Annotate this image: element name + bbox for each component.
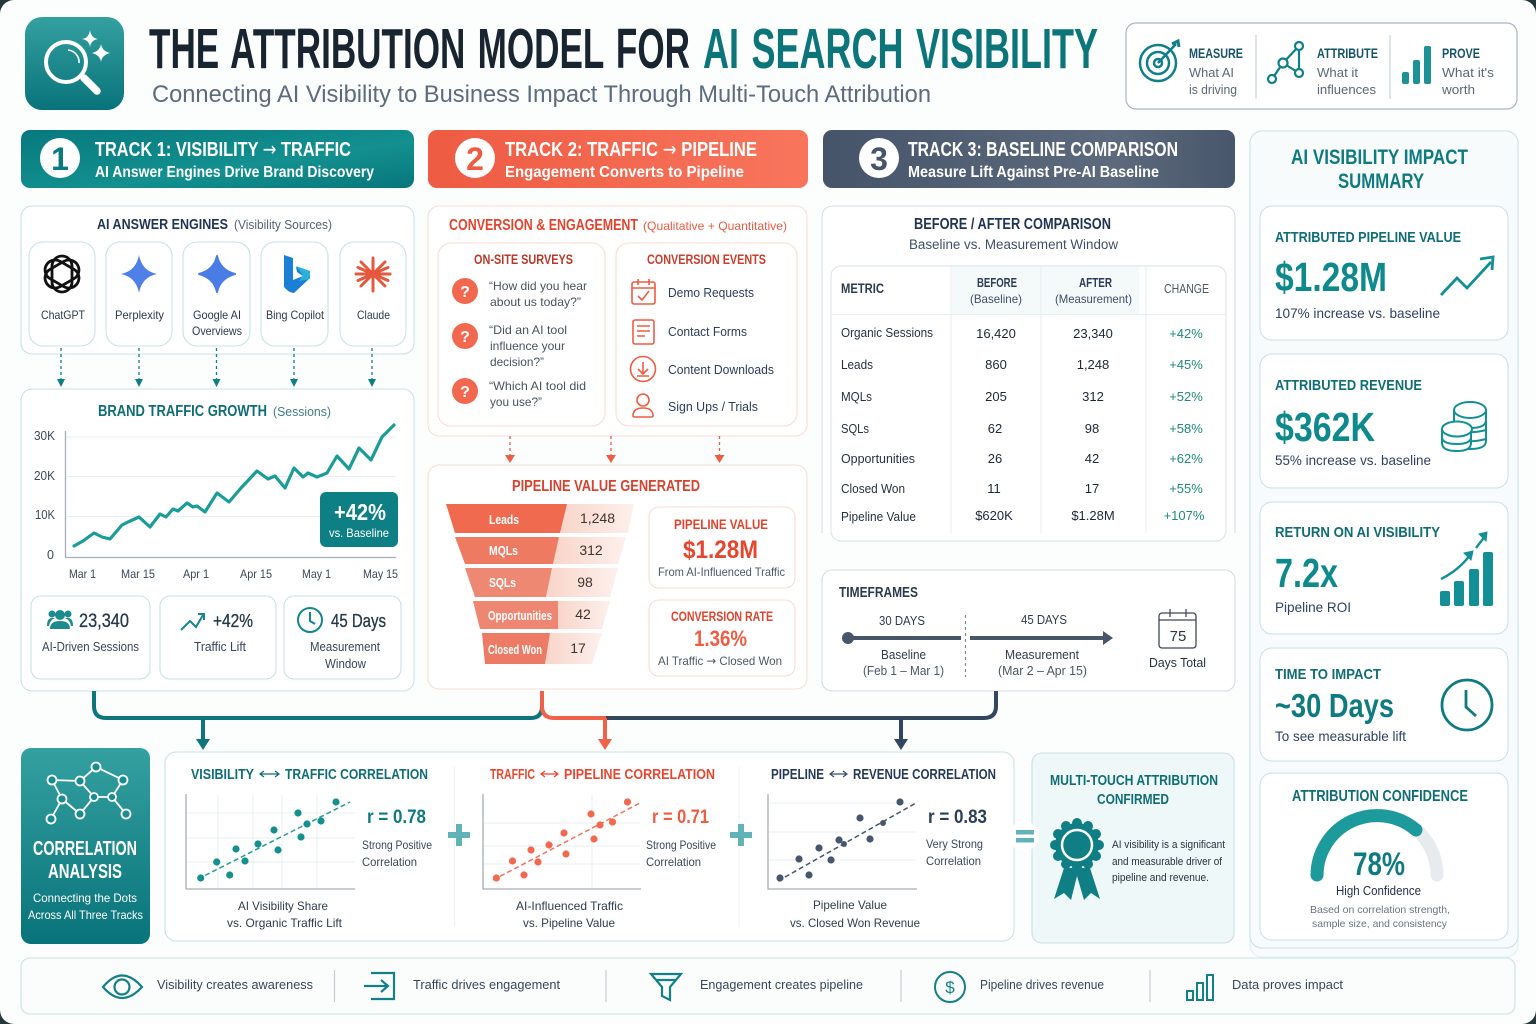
panel: measure attribute prove [1126, 23, 1517, 109]
icon: plus two [730, 824, 752, 846]
subtitle: Connecting AI Visibility to Business Impact Through Multi-Touch Attribution [152, 81, 931, 108]
chart: visibility traffic correlation: Correlation [362, 855, 417, 869]
icon: 75 days calendar: Days Total [1149, 656, 1206, 670]
panel: brand traffic growth [21, 389, 414, 691]
card: attribution confidence: sample size, and consistency [1312, 918, 1448, 930]
table: metrics: 23,340 [1073, 326, 1113, 341]
text: prove [1441, 45, 1494, 97]
funnel chart: SQLs [489, 575, 516, 590]
table: metrics: AFTER [1079, 275, 1112, 290]
timeline: (Mar 2 – Apr 15) [998, 664, 1087, 678]
engine: Perplexity [106, 242, 172, 346]
survey question 3 [452, 378, 586, 409]
heading: conversion and engagement: CONVERSION & ENGAGEMENT [449, 217, 638, 234]
table: metrics: +58% [1169, 421, 1203, 436]
funnel chart: Opportunities [488, 608, 552, 623]
text: prove: PROVE [1442, 45, 1480, 61]
heading: multi-touch attribution: CONFIRMED [1097, 792, 1169, 808]
survey question 1: about us today?” [490, 295, 581, 309]
card: return on AI visibility [1260, 502, 1508, 634]
timeline: 45 DAYS [1021, 613, 1067, 627]
engine: Perplexity: Perplexity [115, 308, 164, 322]
timeline: 30 DAYS [879, 614, 925, 628]
text: attribute: influences [1317, 83, 1376, 97]
survey question 3: you use?” [490, 395, 542, 409]
chart: pipeline revenue correlation: PIPELINE [771, 767, 824, 783]
line chart: sessions: Apr 15 [240, 567, 272, 581]
card: attributed revenue [1260, 354, 1508, 488]
track 1 header: 1 [51, 141, 69, 177]
chart: visibility traffic correlation: r = 0.78 [367, 807, 426, 828]
chart: pipeline revenue correlation: Very Strong [926, 837, 983, 851]
survey question 2: “Did an AI tool [489, 323, 567, 337]
connector: navy [605, 691, 996, 750]
text: correlation analysis: CORRELATION [33, 838, 137, 860]
table: metrics: 26 [988, 451, 1002, 466]
stat: measurement window: Window [325, 657, 367, 671]
line chart: sessions: Mar 15 [121, 567, 155, 581]
heading: pipeline value generated: PIPELINE VALUE GENERATED [512, 478, 700, 495]
heading: timeframes: TIMEFRAMES [839, 585, 918, 601]
card: attributed pipeline value: ATTRIBUTED PIPELINE VALUE [1275, 229, 1461, 246]
heading: AI answer engines [97, 216, 332, 233]
line chart: sessions: May 15 [363, 567, 398, 581]
chart: visibility traffic correlation: VISIBILITY [191, 767, 254, 783]
chart: visibility traffic correlation: vs. Organic Traffic Lift [227, 916, 343, 930]
line chart: sessions: 0 [47, 548, 54, 562]
text: measure: What AI [1189, 66, 1234, 80]
panel: correlation charts [165, 752, 1014, 941]
text: attribute: What it [1317, 66, 1359, 80]
table: metrics: 16,420 [976, 326, 1016, 341]
gauge: 78 percent [1317, 815, 1437, 882]
card: on-site surveys [438, 243, 605, 426]
card: attributed pipeline value: 107% increase vs. baseline [1275, 305, 1440, 321]
table: metrics: +55% [1169, 481, 1203, 496]
table: metrics: Closed Won [841, 482, 905, 496]
timeline: Measurement [1005, 648, 1079, 662]
footer strip [21, 958, 1515, 1014]
card: time to impact: To see measurable lift [1275, 728, 1406, 744]
panel: AI visibility impact summary [1250, 131, 1518, 957]
engine: Google AI Overviews [183, 242, 250, 346]
card: time to impact: ~30 Days [1275, 687, 1394, 724]
line chart: sessions: Apr 1 [183, 567, 209, 581]
chart: pipeline revenue correlation: Correlation [926, 854, 981, 868]
event: content downloads: Content Downloads [668, 363, 774, 377]
icon: target [1140, 41, 1179, 81]
icon: network nodes [1268, 42, 1303, 83]
card: return on AI visibility: RETURN ON AI VISIBILITY [1275, 524, 1440, 541]
survey question 1 [452, 278, 587, 309]
survey question 2: ? [460, 329, 470, 346]
card: conversion events: CONVERSION EVENTS [647, 252, 766, 267]
survey question 2 [452, 323, 567, 369]
stat: traffic lift: Traffic Lift [194, 640, 246, 654]
table: metrics: Pipeline Value [841, 510, 916, 524]
chart: pipeline revenue correlation: r = 0.83 [928, 807, 987, 828]
text: attribution statement: pipeline and revenue. [1112, 872, 1209, 884]
survey question 3: ? [460, 384, 470, 401]
card: return on AI visibility: 7.2x [1275, 550, 1338, 596]
stat: sessions [31, 596, 150, 679]
line chart: sessions: 30K [34, 429, 56, 443]
track 3 header: TRACK 3: BASELINE COMPARISON [908, 139, 1178, 161]
footer item: traffic: Traffic drives engagement [413, 977, 560, 992]
text: attribution statement: AI visibility is a significant [1112, 839, 1225, 851]
icon: clock [1442, 680, 1492, 730]
funnel chart: MQLs [489, 543, 518, 558]
footer item: traffic [364, 973, 560, 999]
icon: connected dots network [46, 762, 130, 824]
card: conversion events [616, 243, 797, 426]
funnel chart: 1,248 [580, 510, 615, 526]
stat: measurement window [284, 596, 401, 679]
text: correlation analysis: Connecting the Dots [33, 891, 137, 905]
table: metrics: +52% [1169, 389, 1203, 404]
card: attributed revenue: 55% increase vs. baseline [1275, 452, 1431, 468]
table: metrics: 17 [1085, 481, 1099, 496]
icon: plus one [448, 824, 470, 846]
footer item: data [1187, 975, 1343, 1000]
event: contact forms [633, 320, 747, 344]
table: metrics: 1,248 [1077, 357, 1109, 372]
track 2 header: 2 [466, 141, 484, 177]
connector: coral [542, 691, 612, 750]
heading: impact summary: AI VISIBILITY IMPACT [1291, 146, 1468, 169]
panel: correlation analysis [21, 748, 150, 944]
text: correlation analysis: Across All Three Tracks [28, 908, 143, 922]
track 1 header: TRACK 1: VISIBILITY → TRAFFIC [95, 137, 351, 161]
callout: +42% vs baseline: +42% [334, 499, 386, 525]
table: metrics: CHANGE [1164, 282, 1209, 296]
card: time to impact [1260, 648, 1508, 761]
text: prove: worth [1441, 83, 1475, 97]
chart: traffic pipeline correlation: PIPELINE CORRELATION [564, 767, 715, 783]
text: correlation analysis: ANALYSIS [48, 861, 122, 883]
stat: measurement window: 45 Days [331, 611, 386, 631]
icon: 75 days calendar [1149, 609, 1206, 670]
line chart: sessions: Mar 1 [69, 567, 96, 581]
table: metrics: 42 [1085, 451, 1099, 466]
table: metrics [831, 266, 1226, 541]
text: attribution statement [1112, 839, 1225, 884]
table: metrics: +45% [1169, 357, 1203, 372]
chart: traffic pipeline correlation: AI-Influenced Traffic [516, 899, 623, 913]
heading: conversion and engagement: (Qualitative + Quantitative) [643, 219, 787, 233]
chart: traffic pipeline correlation: vs. Pipeline Value [523, 916, 615, 930]
survey question 3: “Which AI tool did [489, 379, 586, 393]
connector: teal [94, 691, 542, 750]
track 2 header: Engagement Converts to Pipeline [505, 164, 744, 181]
table: metrics: 860 [985, 357, 1007, 372]
icon: bars [1402, 46, 1431, 84]
arrows: engines to traffic [57, 348, 376, 387]
chart: pipeline revenue correlation: Pipeline Value [813, 898, 887, 912]
survey question 1: ? [460, 284, 470, 301]
funnel chart: 312 [579, 542, 603, 558]
text: prove: What it's [1442, 66, 1494, 80]
text: attribute [1317, 45, 1378, 97]
heading: before after comparison: BEFORE / AFTER COMPARISON [914, 216, 1111, 233]
event: content downloads [630, 356, 774, 382]
table: metrics: BEFORE [977, 275, 1017, 290]
heading: impact summary [1291, 146, 1468, 193]
table: metrics: (Measurement) [1055, 292, 1132, 306]
engine: Claude: Claude [357, 308, 390, 322]
chart: visibility traffic correlation [186, 767, 432, 930]
icon: award ribbon [1050, 818, 1104, 900]
stat: sessions: 23,340 [79, 611, 129, 632]
track 2 header [428, 130, 808, 188]
funnel chart: Leads [489, 512, 519, 527]
text: attribute: ATTRIBUTE [1317, 45, 1378, 61]
event: demo requests [632, 279, 754, 304]
chart: pipeline revenue correlation: vs. Closed Won Revenue [790, 916, 920, 930]
table: metrics: METRIC [841, 281, 884, 296]
timeline: Baseline [881, 648, 926, 662]
table: metrics: 11 [987, 481, 1001, 496]
panel: before after comparison [822, 206, 1235, 541]
footer item: pipeline: $ [945, 978, 955, 997]
event: sign ups [633, 394, 758, 417]
survey question 2: decision?” [490, 355, 544, 369]
footer item: pipeline [935, 972, 1104, 1002]
survey question 1: “How did you hear [489, 279, 587, 293]
footer item: visibility: Visibility creates awareness [157, 977, 313, 992]
text: measure [1189, 45, 1243, 97]
engine: Bing Copilot: Bing Copilot [266, 308, 325, 322]
icon: coins [1442, 402, 1486, 451]
panel: conversion and engagement [428, 206, 807, 436]
table: metrics: MQLs [841, 390, 872, 404]
chart: visibility traffic correlation: Strong Positive [362, 838, 432, 852]
line chart: sessions: 10K [35, 508, 56, 522]
card: pipeline value: $1.28M [683, 536, 758, 564]
table: metrics: 205 [985, 389, 1007, 404]
footer item: visibility [103, 976, 313, 998]
footer item: pipeline: Pipeline drives revenue [980, 977, 1104, 992]
heading: multi-touch attribution: MULTI-TOUCH ATTRIBUTION [1050, 773, 1218, 789]
heading: before after comparison: Baseline vs. Measurement Window [909, 237, 1118, 252]
table: metrics: +107% [1164, 508, 1205, 523]
event: sign ups: Sign Ups / Trials [668, 400, 758, 414]
card: on-site surveys: ON-SITE SURVEYS [474, 252, 573, 267]
table: metrics: Opportunities [841, 452, 915, 466]
card: attribution confidence [1260, 773, 1508, 940]
footer item: engagement: Engagement creates pipeline [700, 977, 863, 992]
connectors: tracks to correlation [94, 691, 996, 750]
card: pipeline value: PIPELINE VALUE [674, 516, 768, 532]
stat: traffic lift: +42% [213, 611, 253, 631]
chart: traffic pipeline correlation [483, 767, 716, 930]
heading: impact summary: SUMMARY [1338, 170, 1424, 193]
engine: ChatGPT [29, 242, 95, 346]
event: contact forms: Contact Forms [668, 325, 747, 339]
stat: measurement window: Measurement [310, 640, 380, 654]
track 2 header: TRACK 2: TRAFFIC → PIPELINE [505, 137, 757, 161]
footer item: data: Data proves impact [1232, 977, 1343, 992]
text: measure: is driving [1189, 83, 1237, 97]
table: metrics: +62% [1169, 451, 1203, 466]
card: attributed revenue: ATTRIBUTED REVENUE [1275, 377, 1422, 394]
arrows: engagement to pipeline [505, 436, 724, 463]
card: return on AI visibility: Pipeline ROI [1275, 599, 1351, 615]
text: measure: MEASURE [1189, 45, 1243, 61]
chart: traffic pipeline correlation: TRAFFIC [490, 767, 535, 783]
heading: before after comparison [909, 216, 1118, 252]
panel: pipeline value generated [428, 465, 807, 689]
card: time to impact: TIME TO IMPACT [1275, 666, 1381, 683]
heading: brand traffic growth: (Sessions) [273, 404, 331, 419]
table: metrics: $1.28M [1071, 508, 1115, 523]
survey question 2: influence your [490, 339, 565, 353]
card: attributed pipeline value: $1.28M [1275, 254, 1387, 300]
icon: equals [1009, 821, 1039, 851]
footer item: engagement [651, 974, 863, 1000]
track 3 header: 3 [870, 141, 888, 177]
card: conversion rate: CONVERSION RATE [671, 609, 773, 624]
funnel chart [446, 504, 634, 664]
table: metrics: 98 [1085, 421, 1099, 436]
text: correlation analysis [28, 838, 143, 922]
heading: multi-touch attribution [1050, 773, 1218, 808]
line chart: sessions: May 1 [302, 567, 331, 581]
engine: ChatGPT: ChatGPT [41, 308, 86, 322]
table: metrics: +42% [1169, 326, 1203, 341]
table: metrics: Organic Sessions [841, 326, 933, 340]
chart: visibility traffic correlation: AI Visibility Share [238, 899, 328, 913]
card: pipeline value [649, 507, 795, 588]
icon: trend up [1441, 257, 1493, 295]
icon: magnifier with sparkles [25, 17, 124, 110]
table: metrics: $620K [975, 508, 1013, 523]
panel: timeframes [822, 570, 1235, 691]
icon: growth bars [1440, 532, 1493, 606]
engine: Google AI Overviews: Overviews [192, 324, 242, 338]
card: attribution confidence: ATTRIBUTION CONFIDENCE [1292, 788, 1468, 805]
engine: Google AI Overviews: Google AI [193, 308, 241, 322]
card: conversion rate: AI Traffic → Closed Won [658, 654, 782, 668]
chart: traffic pipeline correlation: r = 0.71 [652, 807, 709, 828]
chart: traffic pipeline correlation: Strong Positive [646, 838, 716, 852]
heading: brand traffic growth: BRAND TRAFFIC GROWTH [98, 403, 267, 420]
gauge: 78 percent: 78% [1353, 846, 1405, 882]
funnel chart: 17 [570, 640, 586, 656]
table: metrics: (Baseline) [970, 292, 1022, 306]
track 1 header [21, 130, 414, 188]
funnel chart: 98 [577, 574, 593, 590]
chart: visibility traffic correlation: TRAFFIC CORRELATION [285, 767, 428, 783]
timeline [842, 613, 1113, 678]
track 1 header: AI Answer Engines Drive Brand Discovery [95, 164, 374, 181]
icon: 75 days calendar: 75 [1170, 628, 1186, 645]
panel: AI answer engines [21, 206, 414, 354]
callout: +42% vs baseline [320, 492, 398, 547]
track 3 header: Measure Lift Against Pre-AI Baseline [908, 164, 1159, 181]
engine: Bing Copilot [261, 242, 328, 346]
card: conversion rate: 1.36% [694, 626, 747, 651]
heading: AI answer engines: AI ANSWER ENGINES [97, 216, 228, 233]
stat: sessions: AI-Driven Sessions [42, 640, 139, 654]
engine: Claude [340, 242, 406, 346]
callout: +42% vs baseline: vs. Baseline [329, 526, 389, 540]
card: attributed pipeline value [1260, 206, 1508, 340]
funnel chart: Closed Won [488, 642, 542, 657]
table: metrics: 312 [1082, 389, 1104, 404]
card: attributed revenue: $362K [1275, 404, 1375, 450]
funnel chart: 42 [575, 606, 591, 622]
table: metrics: SQLs [841, 422, 869, 436]
header [25, 17, 1517, 110]
card: attribution confidence: Based on correlation strength, [1310, 904, 1450, 916]
text: attribution statement: and measurable driver of [1112, 856, 1223, 868]
line chart: sessions: 20K [34, 469, 56, 483]
table: metrics: 62 [988, 421, 1002, 436]
title: THE ATTRIBUTION MODEL FOR [149, 17, 690, 81]
timeline: (Feb 1 – Mar 1) [863, 664, 944, 678]
track 3 header [823, 130, 1235, 188]
stat: traffic lift [160, 596, 276, 679]
card: pipeline value: From AI-Influenced Traffic [658, 565, 785, 579]
table: metrics: Leads [841, 358, 873, 372]
chart: pipeline revenue correlation: REVENUE CORRELATION [853, 767, 996, 783]
event: demo requests: Demo Requests [668, 286, 754, 300]
heading: AI answer engines: (Visibility Sources) [234, 218, 332, 232]
card: conversion rate [649, 600, 795, 676]
panel: multi-touch attribution confirmed [1032, 753, 1234, 943]
chart: traffic pipeline correlation: Correlation [646, 855, 701, 869]
title: AI SEARCH VISIBILITY [703, 17, 1098, 81]
chart: pipeline revenue correlation [768, 767, 996, 930]
heading: conversion and engagement [449, 217, 787, 234]
card: attribution confidence: High Confidence [1336, 884, 1421, 898]
line chart: sessions [34, 425, 398, 581]
